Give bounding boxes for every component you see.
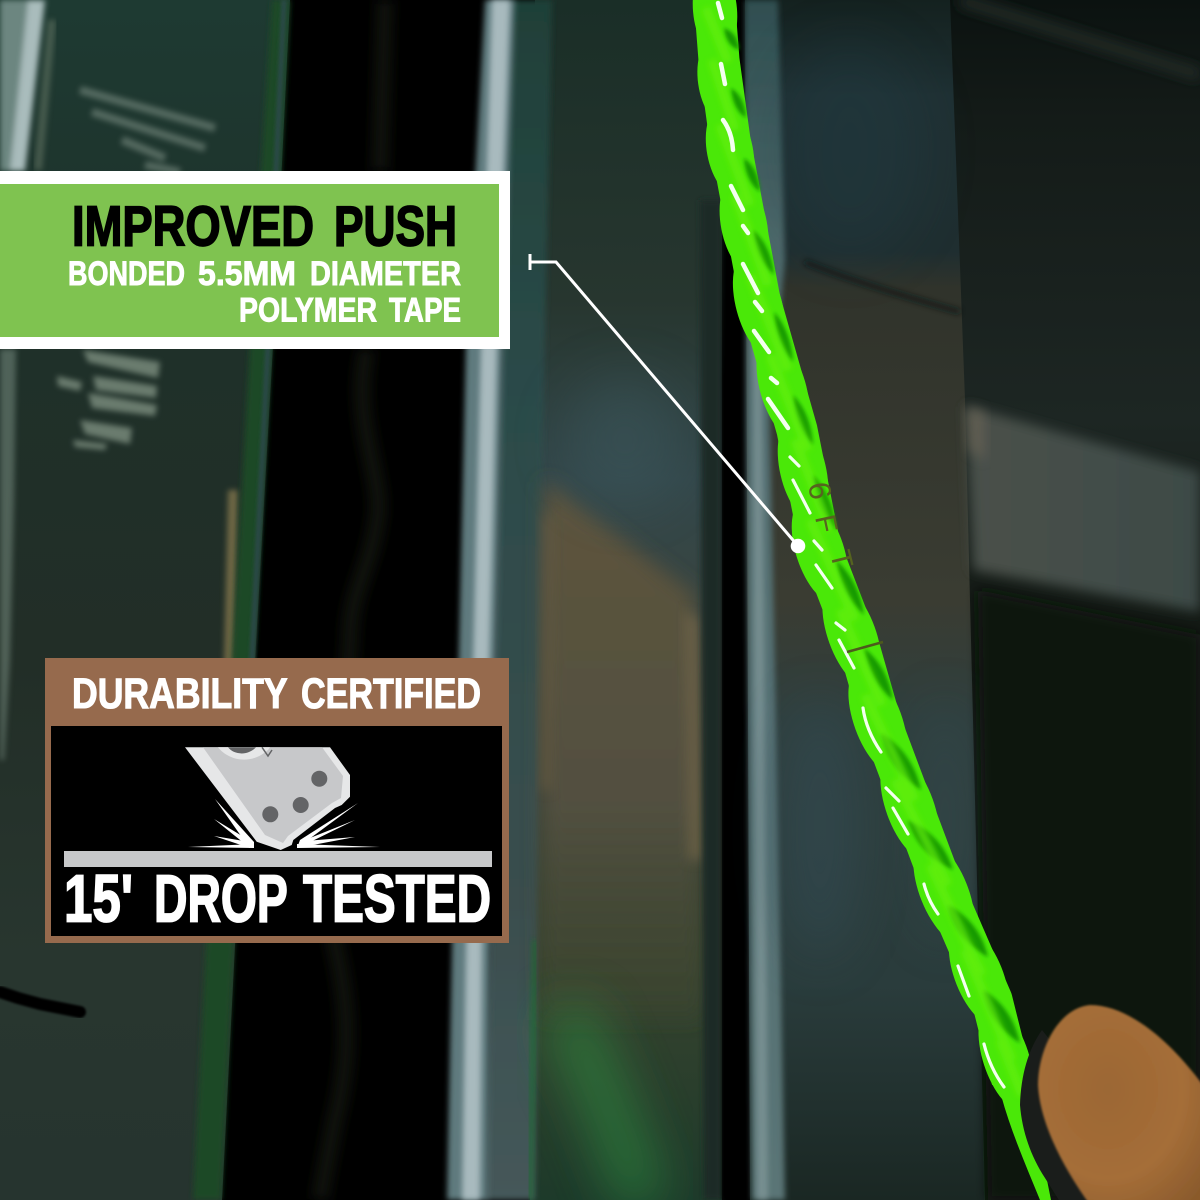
printed foot marks on tape: 6 — [801, 479, 839, 502]
middle stud teal band — [485, 0, 552, 1200]
lower right dark wall — [978, 590, 1200, 1200]
faint ceiling stripe — [960, 0, 1200, 75]
printed foot marks on tape: T — [823, 547, 859, 572]
heading: PUSH — [334, 194, 457, 258]
badge heading: CERTIFIED — [301, 670, 481, 718]
left stud top gray and bright edge — [0, 0, 45, 171]
left stud warm edge — [209, 490, 238, 940]
green twisted polymer tape — [689, 0, 1052, 1200]
middle stud panel — [530, 0, 722, 1200]
black mark on left stud — [0, 992, 80, 1012]
impact sparks — [188, 799, 380, 848]
far right wall — [950, 0, 1200, 1200]
left stud lit scratches top — [80, 90, 215, 172]
right stud lower blue patch — [780, 700, 860, 960]
tape core — [714, 0, 1012, 1080]
twist bright ridges — [706, 8, 1022, 1095]
right stud — [745, 0, 985, 1200]
right stud blue panel — [775, 40, 925, 260]
middle stud green reflection — [565, 1010, 645, 1200]
subheading line 2: TAPE — [389, 292, 461, 330]
middle stud bright edge — [447, 0, 515, 1200]
subheading line 1: BONDED — [68, 255, 185, 293]
leader line from callout to tape — [530, 254, 805, 553]
tape lobes — [689, 0, 1052, 1200]
badge black panel — [51, 726, 502, 936]
glove cuff — [1020, 1030, 1110, 1200]
faint wavy shadow in gap — [320, 0, 385, 1200]
badge heading: DURABILITY — [72, 670, 287, 718]
subheading line 2: POLYMER — [239, 292, 377, 330]
subheading line 1: DIAMETER — [310, 255, 461, 293]
callout panel: improved push — [0, 171, 510, 349]
left stud rough lit edge — [0, 349, 16, 760]
middle stud brown panel — [540, 480, 702, 1020]
right stud bright edge — [745, 0, 785, 1200]
icon: utility knife hitting ground — [185, 747, 380, 850]
drop tested label: DROP — [154, 862, 287, 936]
badge: durability certified — [45, 658, 509, 943]
printed foot marks on tape — [801, 479, 883, 652]
badge frame — [45, 658, 509, 943]
left stud green edge — [193, 0, 290, 1200]
right stud seam — [805, 262, 960, 312]
middle stud right shadow — [700, 200, 722, 1200]
drop tested label: 15' — [64, 862, 133, 936]
middle stud blue patch — [565, 375, 685, 505]
drop tested label: TESTED — [303, 862, 491, 936]
middle stud tan edges — [684, 610, 704, 860]
left stud — [0, 0, 290, 1200]
lit wall patch right — [966, 406, 1200, 612]
left stud rust texture — [38, 20, 52, 170]
black gap — [722, 170, 746, 1200]
heading: IMPROVED — [72, 194, 314, 258]
glove fingertip — [1038, 1005, 1200, 1200]
green panel — [0, 184, 499, 337]
twist shadows — [724, 28, 1020, 1043]
subheading line 1: 5.5MM — [198, 255, 296, 293]
printed foot marks on tape: F — [808, 512, 843, 536]
gloved hand — [1020, 1005, 1200, 1200]
ground bar — [64, 851, 492, 867]
white frame — [0, 171, 510, 349]
glossy highlights — [718, 3, 1004, 1087]
left stud lit patches under callout — [57, 350, 160, 450]
